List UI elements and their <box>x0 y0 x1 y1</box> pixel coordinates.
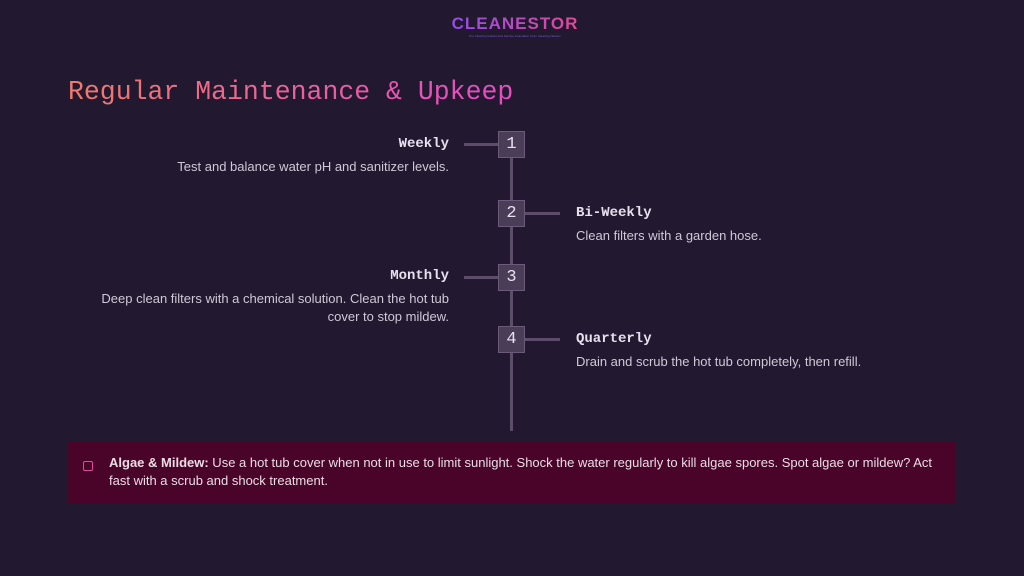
timeline <box>101 131 861 431</box>
title: Regular Maintenance & Upkeep <box>68 77 513 107</box>
callout <box>68 442 956 504</box>
icon: note <box>83 461 93 471</box>
step 2 text: Bi-Weekly <box>576 205 652 221</box>
logo: CLEANESTOR <box>452 14 578 33</box>
step 1 text: Weekly <box>399 136 449 152</box>
callout: fast with a scrub and shock treatment. <box>109 473 328 488</box>
step 2 text: Clean filters with a garden hose. <box>576 228 762 243</box>
step 4: 4 <box>506 330 517 349</box>
step 4 text: Drain and scrub the hot tub completely, then refill. <box>576 354 861 369</box>
step 2 <box>498 200 525 227</box>
step 3 text <box>101 268 449 324</box>
step 4 <box>498 326 525 353</box>
step 2: 2 <box>506 204 517 223</box>
step 1 <box>498 131 525 158</box>
step 3: 3 <box>506 268 517 287</box>
step 3 text: cover to stop mildew. <box>328 309 449 324</box>
step 3 text: Monthly <box>390 268 449 284</box>
callout: Algae & Mildew: Use a hot tub cover when not in use to limit sunlight. Shock the water regularly to kill algae spores. Spot algae or mildew? Act <box>109 455 932 470</box>
step 4 text: Quarterly <box>576 331 652 347</box>
step 1: 1 <box>506 135 517 154</box>
step 1 text <box>177 136 449 174</box>
step 3 <box>498 264 525 291</box>
step 1 text: Test and balance water pH and sanitizer levels. <box>177 159 449 174</box>
step 3 text: Deep clean filters with a chemical solution. Clean the hot tub <box>101 291 449 306</box>
logo: Pro Cleaning Guides And Service Journalism From Cleaning Nations <box>469 34 561 38</box>
step 2 text <box>576 205 762 243</box>
step 4 text <box>576 331 861 369</box>
